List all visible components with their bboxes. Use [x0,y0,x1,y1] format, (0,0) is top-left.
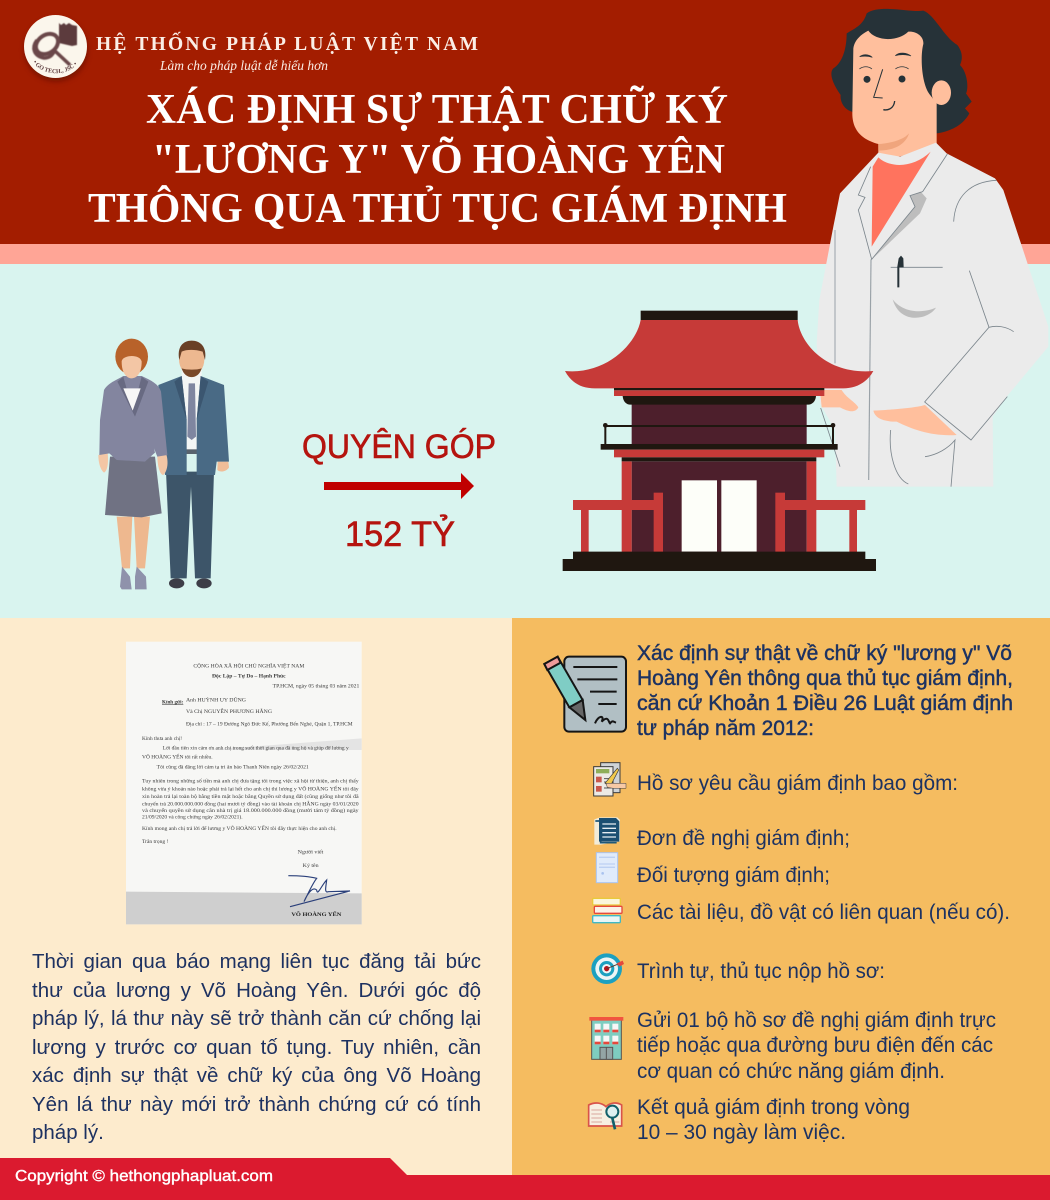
woman [98,339,168,589]
temple ridge [641,311,798,320]
doctor coat shadows [872,192,927,259]
label: amount: 152 TỶ [345,514,455,554]
letter text [142,662,359,918]
text block: letter commentary: thư của lương y Võ Hoàng Yên. Dưới góc độ [32,978,481,1002]
doctor face details [859,53,911,151]
text block: letter commentary [32,950,481,1144]
salmon stripe [0,244,1050,264]
icon: target [591,953,624,984]
letter text: Ký tên [303,863,319,869]
text block: letter commentary: Yên lá thư này mới trở thành chứng cứ có tính [32,1092,481,1116]
heading: procedure: Xác định sự thật về chữ ký "lương y" Võ [637,642,1012,665]
temple roof [565,320,873,388]
letter paper [126,642,362,924]
temple base [563,552,876,571]
letter text: Và Chị NGUYỄN PHƯƠNG HẰNG [186,707,272,715]
text block: letter commentary: Thời gian qua báo mạng liên tục đăng tải bức [32,950,481,973]
doctor hair [831,9,972,133]
doctor face and neck [852,31,937,160]
heading: procedure: Hoàng Yên thông qua thủ tục giám định, [637,667,1013,690]
text: related materials: Các tài liệu, đồ vật có liên quan (nếu có). [637,901,1010,924]
doctor coat details [821,154,1014,487]
doctor hands [820,390,957,435]
label: donation: QUYÊN GÓP [302,428,496,466]
temple columns and fence [573,461,865,552]
text block: letter commentary: pháp lý. [32,1121,104,1144]
icon: logo: • GO TECH., JSC • [34,60,76,74]
copyright: Copyright © hethongphapluat.com [15,1168,273,1185]
temple balcony [601,423,838,461]
temple lower storey [632,461,807,552]
organisation name: HỆ THỐNG PHÁP LUẬT VIỆT NAM [96,33,478,55]
arrow [324,473,474,499]
icon: office building [589,1017,623,1059]
text block: letter commentary: pháp lý, lá thư này sẽ trở thành căn cứ chống lại [32,1007,481,1030]
text: result [637,1096,910,1144]
text: sequence: Trình tự, thủ tục nộp hồ sơ: [637,960,885,983]
man [158,341,229,588]
heading: procedure: tư pháp năm 2012: [637,717,814,740]
letter crease [207,738,362,750]
letter text: Lời đầu tiên xin cảm ơn anh chị trong suốt thời gian qua đã ủng hộ và giúp đỡ lương y [163,745,349,752]
heading: procedure: căn cứ Khoản 1 Điều 26 Luật giám định [637,692,1013,715]
text: subject: Đối tượng giám định; [637,864,830,887]
temple illustration [563,311,876,571]
panel: letter background [0,618,512,1178]
icon: application papers [594,817,620,845]
tagline: Làm cho pháp luật dễ hiểu hơn [159,58,328,73]
text block: letter commentary: xác định sự thật về chữ ký của ông Võ Hoàng [32,1064,481,1087]
letter text: Tuy nhiên trong những số tiền mà anh chị đưa tặng tôi trong việc xã hội từ thiện, anh chị thấy [142,778,359,785]
footer band [0,1158,1050,1200]
icon: logo [22,15,90,84]
letter text: không vừa ý khoản nào hoặc phải trả lại hết cho anh chị thì lương y VÕ HOÀNG YẾN tôi đây [142,784,359,792]
letter text: Trân trọng ! [142,839,168,845]
doctor lab coat [817,143,1048,487]
header band [0,0,1050,244]
text: result: Kết quả giám định trong vòng [637,1096,910,1119]
title: XÁC ĐỊNH SỰ THẬT CHỮ KÝ [146,85,728,133]
letter text: VÕ HOÀNG YẾN [291,910,342,918]
text: submission: Gửi 01 bộ hồ sơ đề nghị giám định trực [637,1009,996,1032]
letter text: TP.HCM, ngày 05 tháng 03 năm 2021 [273,684,359,690]
signature [288,876,350,907]
letter text: xin hoàn trả lại toàn bộ bằng tiền mặt hoặc bằng Quyền sử dụng đất (cũng giống như tôi đã [142,793,359,800]
title [88,85,787,232]
letter text: VÕ HOÀNG YẾN tôi rất nhiều. [142,752,213,760]
couple illustration [98,339,229,589]
letter text: 21/09/2020 và công chứng ngày 26/02/2021). [142,813,243,820]
letter text: Kính gửi: [162,699,183,705]
text block: letter commentary: lương y trước cơ quan tố tụng. Tuy nhiên, cần [32,1036,481,1058]
letter text: Độc Lập – Tự Do – Hạnh Phúc [212,674,286,680]
doctor pocket shadow [893,299,936,318]
panel: procedure background [512,618,1050,1178]
doctor illustration [817,9,1048,487]
letter text: chuyển trả 20.000.000.000 đồng (hai mươi tỷ đồng) vào tài khoản chị HẰNG ngày 03/01/2020 [142,800,359,808]
heading: procedure [637,642,1013,740]
letter text: Anh HUỲNH UY DŨNG [186,695,246,703]
letter text: Tôi cũng đã đăng lời cảm tạ tri ân báo Thanh Niên ngày 26/02/2021 [157,764,309,770]
letter text: và chuyển quyền sử dụng căn nhà trị giá 18.000.000.000 đồng (mười tám tỷ đồng) ngày [142,807,359,814]
text: application: Đơn đề nghị giám định; [637,827,850,850]
letter shadow bands [126,892,362,924]
temple upper storey [614,388,824,445]
title: "LƯƠNG Y" VÕ HOÀNG YÊN [152,136,725,183]
text: submission [637,1009,996,1083]
letter text: CỘNG HÒA XÃ HỘI CHỦ NGHĨA VIỆT NAM [193,662,304,670]
letter text: Kính mong anh chị trả lời để lương y VÕ HOÀNG YẾN tôi đây thực hiện cho anh chị. [142,824,337,832]
text: result: 10 – 30 ngày làm việc. [637,1121,846,1144]
text: submission: tiếp hoặc qua đường bưu điện đến các [637,1034,993,1057]
text: dossier: Hồ sơ yêu cầu giám định bao gồm: [637,772,958,795]
icon: subject document [596,853,618,883]
panel: donation scene background [0,264,1050,618]
letter text: Địa chỉ : 17 – 19 Đường Ngô Đức Kế, Phường Bến Nghé, Quận 1, TP.HCM [186,721,353,728]
title: THÔNG QUA THỦ TỤC GIÁM ĐỊNH [88,184,787,232]
pen in pocket [897,256,904,287]
icon: book and magnifier [589,1103,622,1129]
doctor ear [932,80,951,105]
icon: document and pen [544,657,626,732]
letter image [126,642,362,924]
icon: books [593,898,622,923]
doctor shirt [872,152,931,247]
icon: checklist [594,763,626,796]
letter text: Kính thưa anh chị! [142,736,182,742]
letter text: Người viết [298,849,324,856]
text: submission: cơ quan có chức năng giám định. [637,1060,945,1083]
